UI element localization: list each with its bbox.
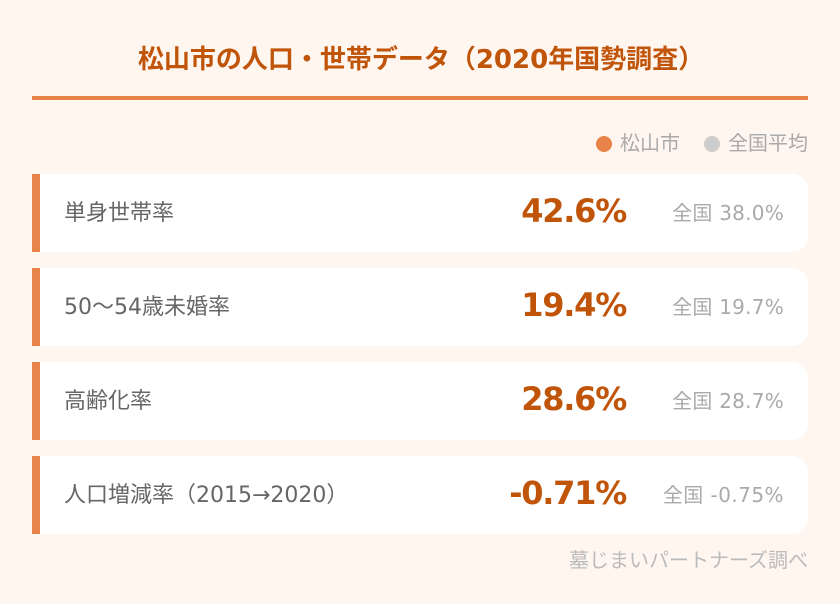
row label: 人口増減率（2015→2020） <box>64 483 348 508</box>
source note: 墓じまいパートナーズ調べ <box>569 548 808 572</box>
row label: 高齢化率 <box>64 389 152 414</box>
Matsuyama value: 19.4% <box>521 286 626 324</box>
Matsuyama value: -0.71% <box>509 474 626 512</box>
row label: 単身世帯率 <box>64 201 174 226</box>
panel: population change rate <box>32 456 808 534</box>
Matsuyama value: 42.6% <box>521 192 626 230</box>
accent bar <box>32 362 40 440</box>
accent bar <box>32 268 40 346</box>
national value: 全国 38.0% <box>672 201 784 225</box>
legend label: Matsuyama: 松山市 <box>620 131 680 155</box>
legend label: national average: 全国平均 <box>728 131 808 155</box>
legend dot: Matsuyama <box>596 136 612 152</box>
national value: 全国 -0.75% <box>663 483 784 507</box>
legend dot: national average <box>704 136 720 152</box>
title underline <box>32 96 808 100</box>
panel: single-person household rate <box>32 174 808 252</box>
panel: unmarried rate age 50-54 <box>32 268 808 346</box>
national value: 全国 28.7% <box>672 389 784 413</box>
legend <box>596 131 808 155</box>
accent bar <box>32 456 40 534</box>
panel: aging rate <box>32 362 808 440</box>
national value: 全国 19.7% <box>672 295 784 319</box>
accent bar <box>32 174 40 252</box>
title: 松山市の人口・世帯データ（2020年国勢調査） <box>138 45 704 75</box>
Matsuyama value: 28.6% <box>521 380 626 418</box>
row label: 50～54歳未婚率 <box>64 295 230 320</box>
